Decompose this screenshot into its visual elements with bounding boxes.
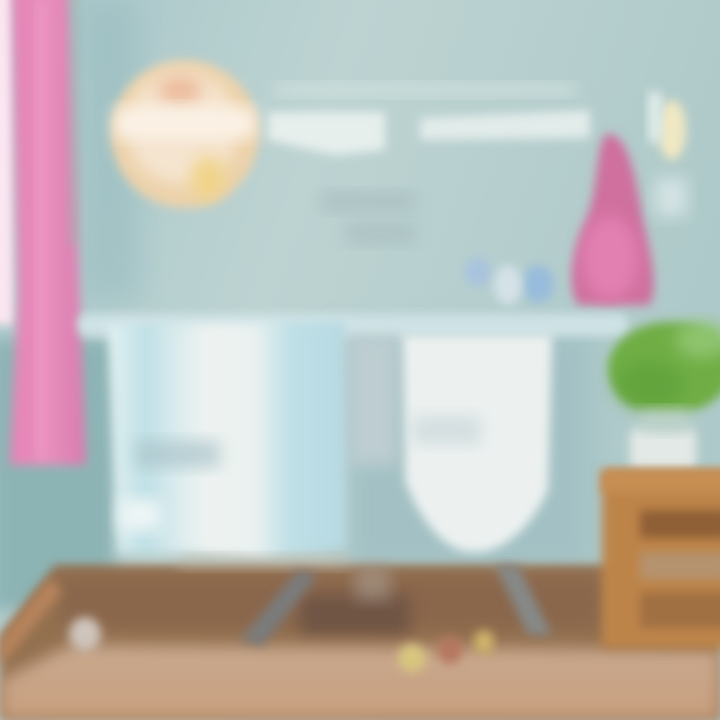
wall clock bbox=[111, 60, 259, 208]
floor bbox=[0, 555, 720, 720]
clothes pegs bbox=[465, 257, 554, 305]
hanging pink towel bbox=[572, 92, 687, 305]
left towels on rack bbox=[108, 322, 346, 558]
right white towel bbox=[350, 335, 552, 552]
curtain: pink bbox=[0, 0, 86, 465]
rack legs bbox=[240, 565, 552, 646]
wooden cabinet bbox=[602, 470, 720, 648]
plant bbox=[608, 322, 720, 470]
blurred subheading bbox=[320, 192, 415, 244]
toys on floor bbox=[398, 630, 494, 672]
drying rack rail bbox=[78, 314, 628, 336]
blurred heading bbox=[268, 84, 590, 155]
